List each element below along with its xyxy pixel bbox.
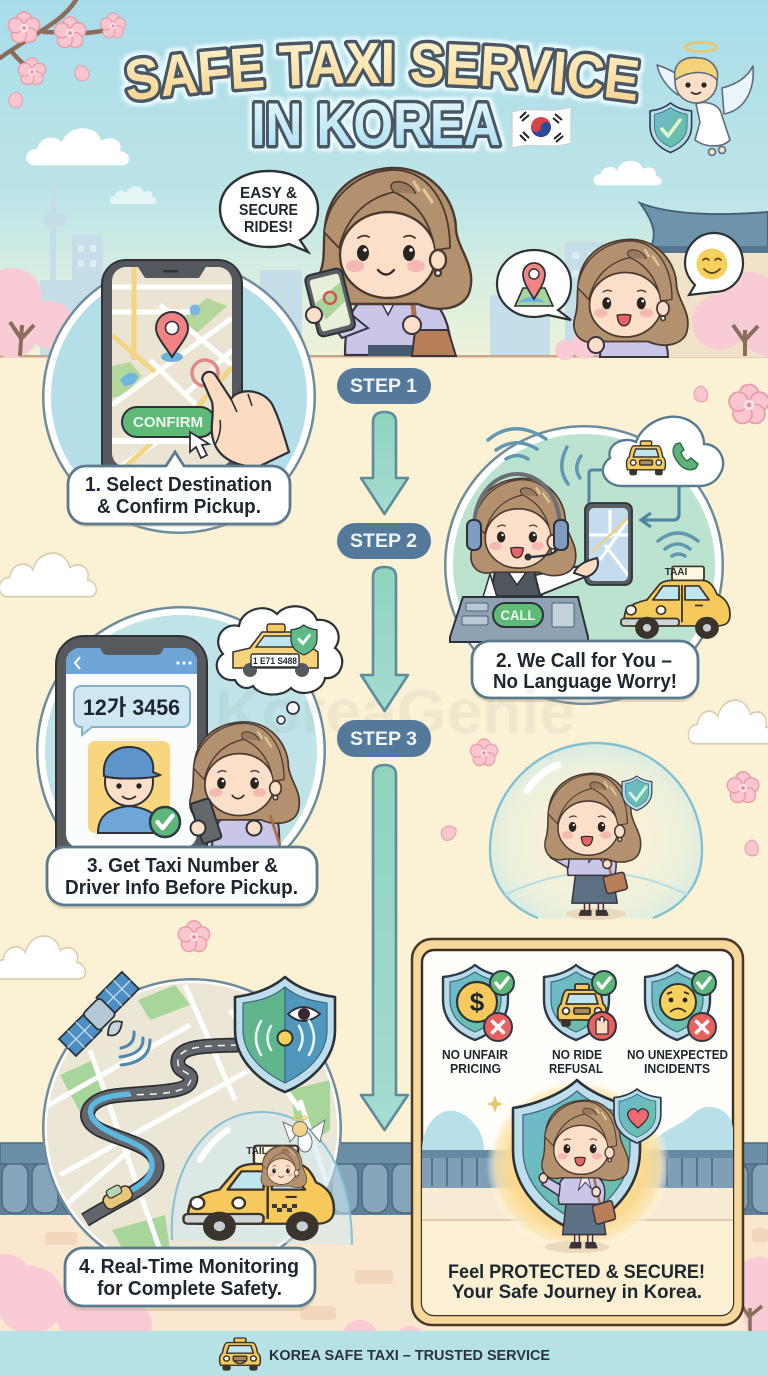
scattered blossoms xyxy=(178,384,768,952)
benefit: no ride refusal: NO RIDE xyxy=(552,1048,602,1062)
cherry blossom branch xyxy=(0,0,126,109)
scene backdrop xyxy=(422,1107,733,1316)
map bubble xyxy=(497,250,571,320)
confirm button: CONFIRM xyxy=(133,415,203,431)
speech bubble: easy and secure rides: SECURE xyxy=(239,202,298,219)
title: IN KOREA xyxy=(251,91,501,158)
taxi xyxy=(621,566,730,638)
cloud with taxi and phone xyxy=(589,417,723,527)
speech bubble: easy and secure rides: RIDES! xyxy=(244,219,293,236)
step 2 pill: STEP 2 xyxy=(350,531,417,552)
thought bubble with taxi and plate: 1 E71 S488 xyxy=(253,656,297,666)
caption 4: 4. Real-Time Monitoring xyxy=(79,1256,299,1278)
plate bubble: 12가 3456 xyxy=(83,695,180,720)
step 2 pill xyxy=(337,523,431,559)
plate bubble xyxy=(74,686,190,735)
small car on route xyxy=(99,1180,135,1211)
phone with route xyxy=(574,503,632,585)
satellite xyxy=(57,972,150,1065)
benefit: no unexpected incidents xyxy=(627,965,728,1076)
bubble dome xyxy=(490,743,702,918)
cherry trees xyxy=(0,268,768,1356)
step 1 pill xyxy=(337,368,431,404)
thought bubble with taxi and plate xyxy=(217,606,342,724)
caption 1 xyxy=(68,452,290,527)
footer bar xyxy=(0,1331,768,1376)
caption 4: for Complete Safety. xyxy=(97,1278,282,1300)
monitoring shield xyxy=(235,977,335,1092)
panel: step 4 real-time monitoring xyxy=(40,972,352,1311)
small character with map and smile bubbles xyxy=(497,233,743,357)
footer bar: KOREA SAFE TAXI – TRUSTED SERVICE xyxy=(269,1348,550,1364)
woman xyxy=(545,773,641,915)
caption 1: & Confirm Pickup. xyxy=(97,496,261,518)
confirm button xyxy=(122,407,215,437)
protected character with shield and glow xyxy=(486,1079,670,1253)
main character holding phone xyxy=(304,168,471,356)
call console xyxy=(450,597,588,642)
benefit: no ride refusal: REFUSAL xyxy=(549,1062,603,1076)
title xyxy=(119,34,646,158)
call console: CALL xyxy=(500,608,536,623)
speech bubble: easy and secure rides xyxy=(220,171,318,252)
signal waves xyxy=(488,429,698,556)
map xyxy=(47,983,337,1247)
closing message xyxy=(448,1261,705,1303)
closing message: Your Safe Journey in Korea. xyxy=(452,1281,702,1303)
caption 2: No Language Worry! xyxy=(493,671,677,693)
caption 2: 2. We Call for You – xyxy=(496,650,672,672)
destination pin xyxy=(156,312,218,386)
step 3 pill xyxy=(337,720,431,757)
watermark: KoreaGenie xyxy=(215,678,575,747)
arrow: step 3 to result xyxy=(361,765,408,1130)
taxi: TAAI xyxy=(665,567,688,578)
icon: guardian angel with shield xyxy=(650,42,753,156)
phone with plate and driver xyxy=(56,636,207,850)
protected character in dome xyxy=(490,743,702,920)
taxi in protective bubble: TAIL xyxy=(246,1146,268,1157)
arrow: step 1 to step 2 xyxy=(361,412,408,514)
pointing hand and cursor xyxy=(190,372,289,466)
title: SAFE TAXI SERVICE xyxy=(119,34,646,109)
hanok roof xyxy=(640,203,768,357)
panel: step 3 taxi number and driver info xyxy=(36,606,342,909)
speech bubble: easy and secure rides: EASY & xyxy=(240,185,297,202)
benefit: no unfair pricing xyxy=(442,965,514,1076)
caption 3 xyxy=(47,847,317,909)
benefit: no unfair pricing: PRICING xyxy=(450,1062,501,1076)
operator with headset xyxy=(467,474,590,597)
clouds xyxy=(0,128,768,979)
driver photo xyxy=(88,741,180,837)
caption 1: 1. Select Destination xyxy=(85,474,272,496)
panel: safety benefits xyxy=(412,939,743,1325)
caption 3: Driver Info Before Pickup. xyxy=(65,877,298,899)
benefit: no ride refusal xyxy=(544,965,616,1076)
closing message: Feel PROTECTED & SECURE! xyxy=(448,1261,705,1283)
arrow: step 2 to step 3 xyxy=(361,567,408,711)
caption 3: 3. Get Taxi Number & xyxy=(87,855,278,877)
benefit: no unfair pricing: $ xyxy=(470,987,485,1017)
icon: korean flag xyxy=(512,107,571,148)
panel: step 1 select destination xyxy=(42,260,316,534)
smile bubble xyxy=(685,233,743,295)
benefit: no unfair pricing: NO UNFAIR xyxy=(442,1048,508,1062)
taxi in protective bubble xyxy=(172,1112,352,1245)
winding route xyxy=(85,1045,238,1220)
benefit: no unexpected incidents: INCIDENTS xyxy=(644,1062,710,1076)
step 1 pill: STEP 1 xyxy=(350,376,417,397)
character checking phone xyxy=(190,722,299,850)
caption 2 xyxy=(472,641,698,702)
phone with map xyxy=(102,260,242,475)
caption 4 xyxy=(65,1248,315,1311)
step 3 pill: STEP 3 xyxy=(350,729,417,750)
benefit: no unexpected incidents: NO UNEXPECTED xyxy=(627,1048,728,1062)
panel: step 2 we call for you xyxy=(444,417,730,705)
